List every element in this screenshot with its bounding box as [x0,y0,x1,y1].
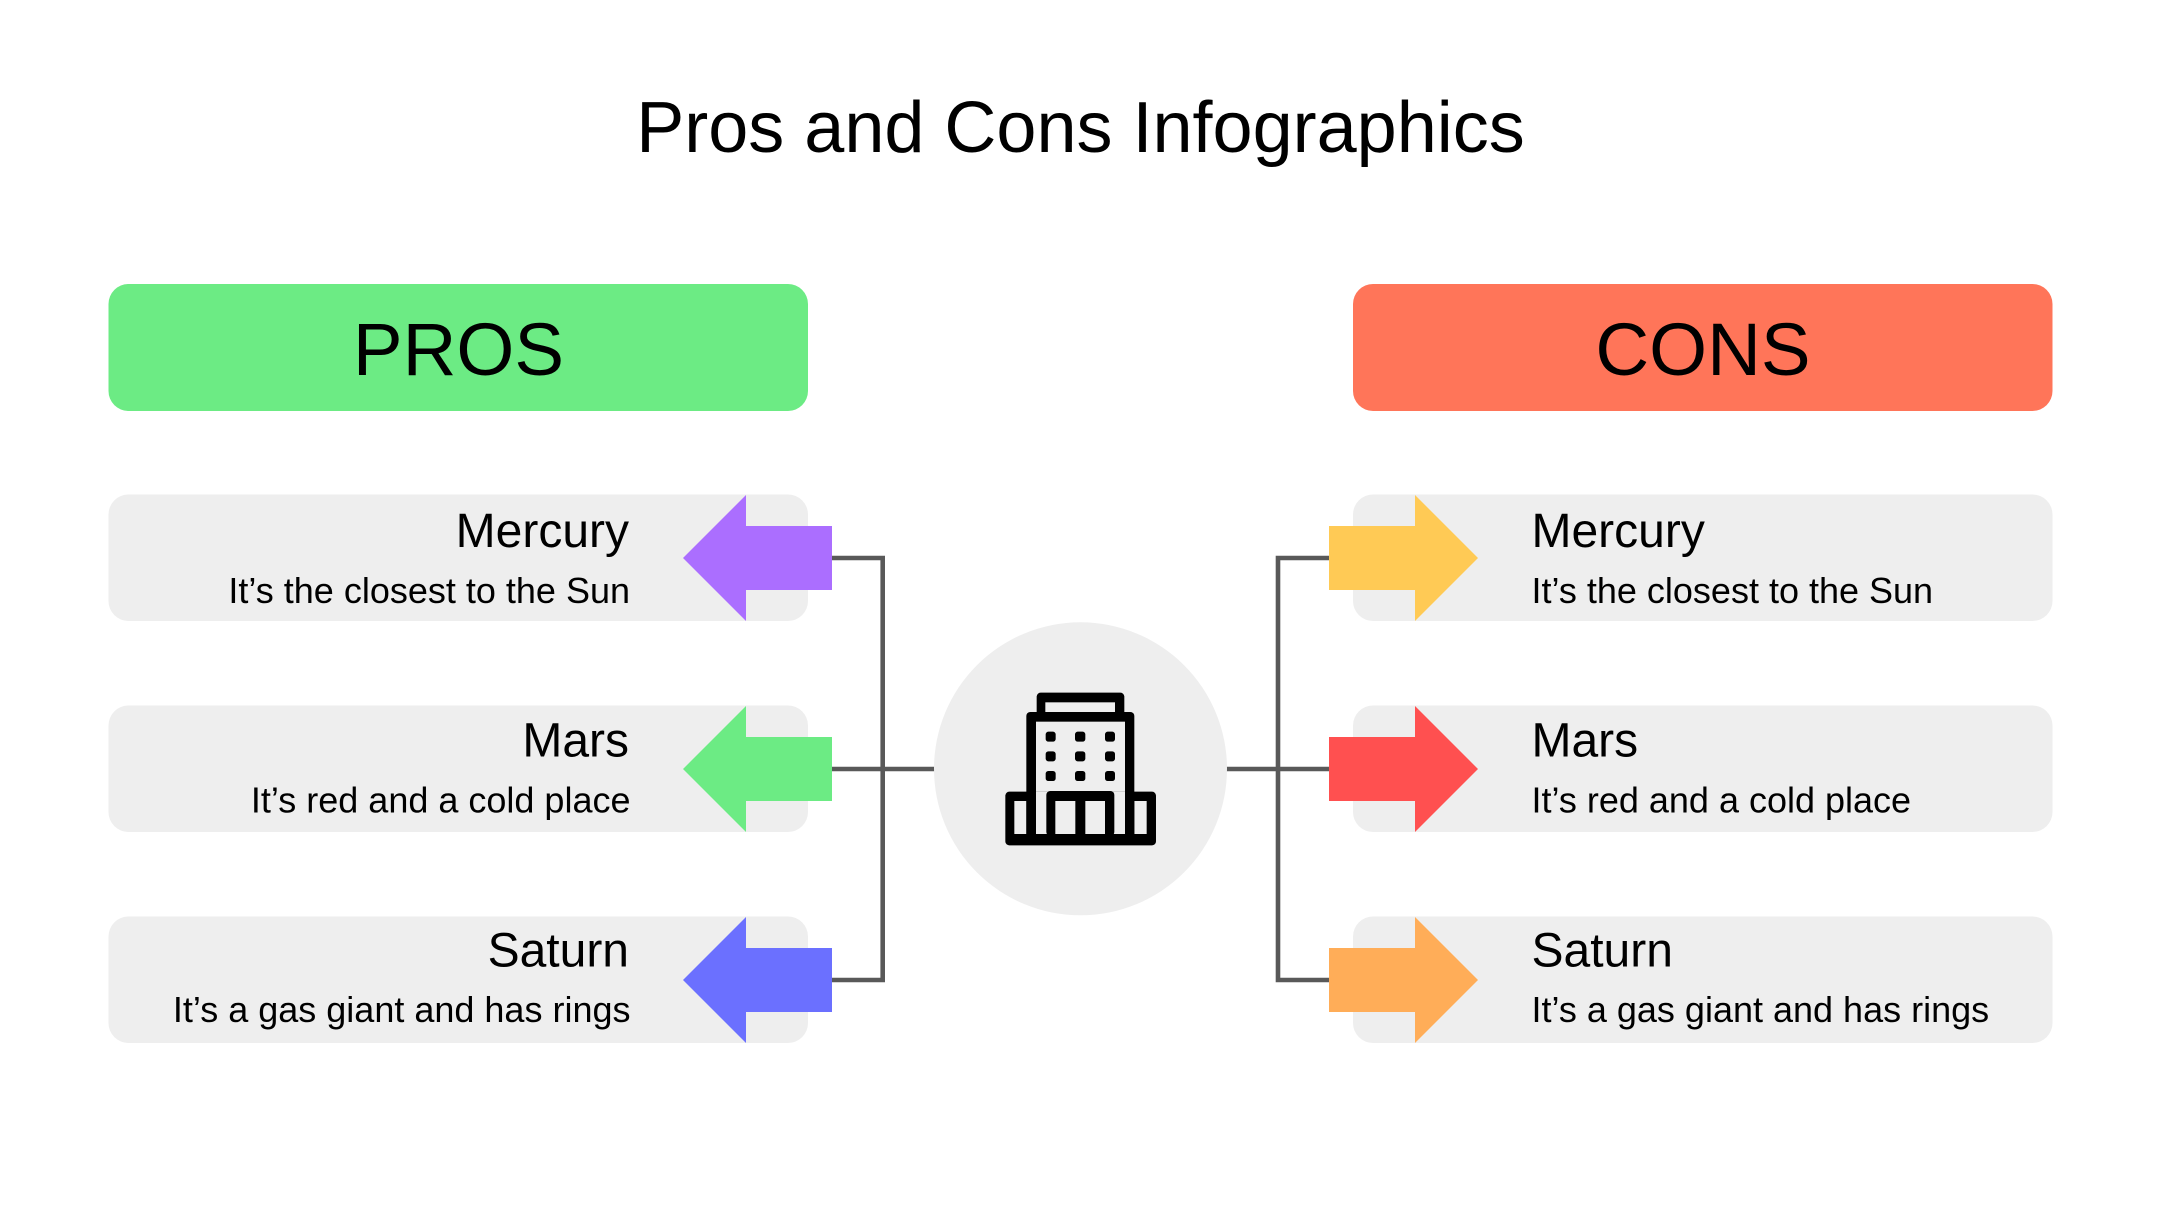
panel: cons item Mars [1353,706,2052,832]
panel: cons item Saturn [1353,916,2052,1043]
arrow: green left [683,706,832,832]
panel: cons header: CONS [1595,308,1811,391]
icon: building [1005,693,1156,845]
title: Pros and Cons Infographics [636,88,1525,168]
panel: pros item Mercury [108,494,808,621]
panel: cons header [1353,284,2052,411]
panel: cons item Mercury: It’s the closest to the Sun [1532,570,1933,611]
panel: cons item Saturn: It’s a gas giant and has rings [1532,989,1989,1030]
arrow: yellow right [1329,495,1478,621]
panel: cons item Saturn: Saturn [1532,924,1673,978]
panel: pros item Saturn [108,916,808,1043]
connector: right bracket [1220,558,1329,980]
connector: left bracket [832,558,940,980]
panel: cons item Mercury: Mercury [1532,505,1705,558]
panel: pros item Mercury: Mercury [456,505,629,558]
panel: pros item Saturn: Saturn [488,924,629,978]
arrow: orange right [1329,917,1478,1043]
panel: pros header [108,284,808,411]
center circle [934,622,1227,915]
panel: pros item Mars: Mars [522,714,629,768]
panel: cons item Mars: Mars [1532,714,1638,768]
panel: cons item Mercury [1353,494,2052,621]
arrow: blue left [683,917,832,1043]
panel: pros item Mars [108,706,808,832]
arrow: purple left [683,495,832,621]
panel: pros item Mars: It’s red and a cold place [251,780,630,820]
panel: pros item Saturn: It’s a gas giant and has rings [173,989,630,1030]
panel: pros header: PROS [353,308,564,391]
arrow: red right [1329,706,1478,832]
panel: pros item Mercury: It’s the closest to the Sun [228,570,630,611]
panel: cons item Mars: It’s red and a cold place [1532,780,1911,820]
